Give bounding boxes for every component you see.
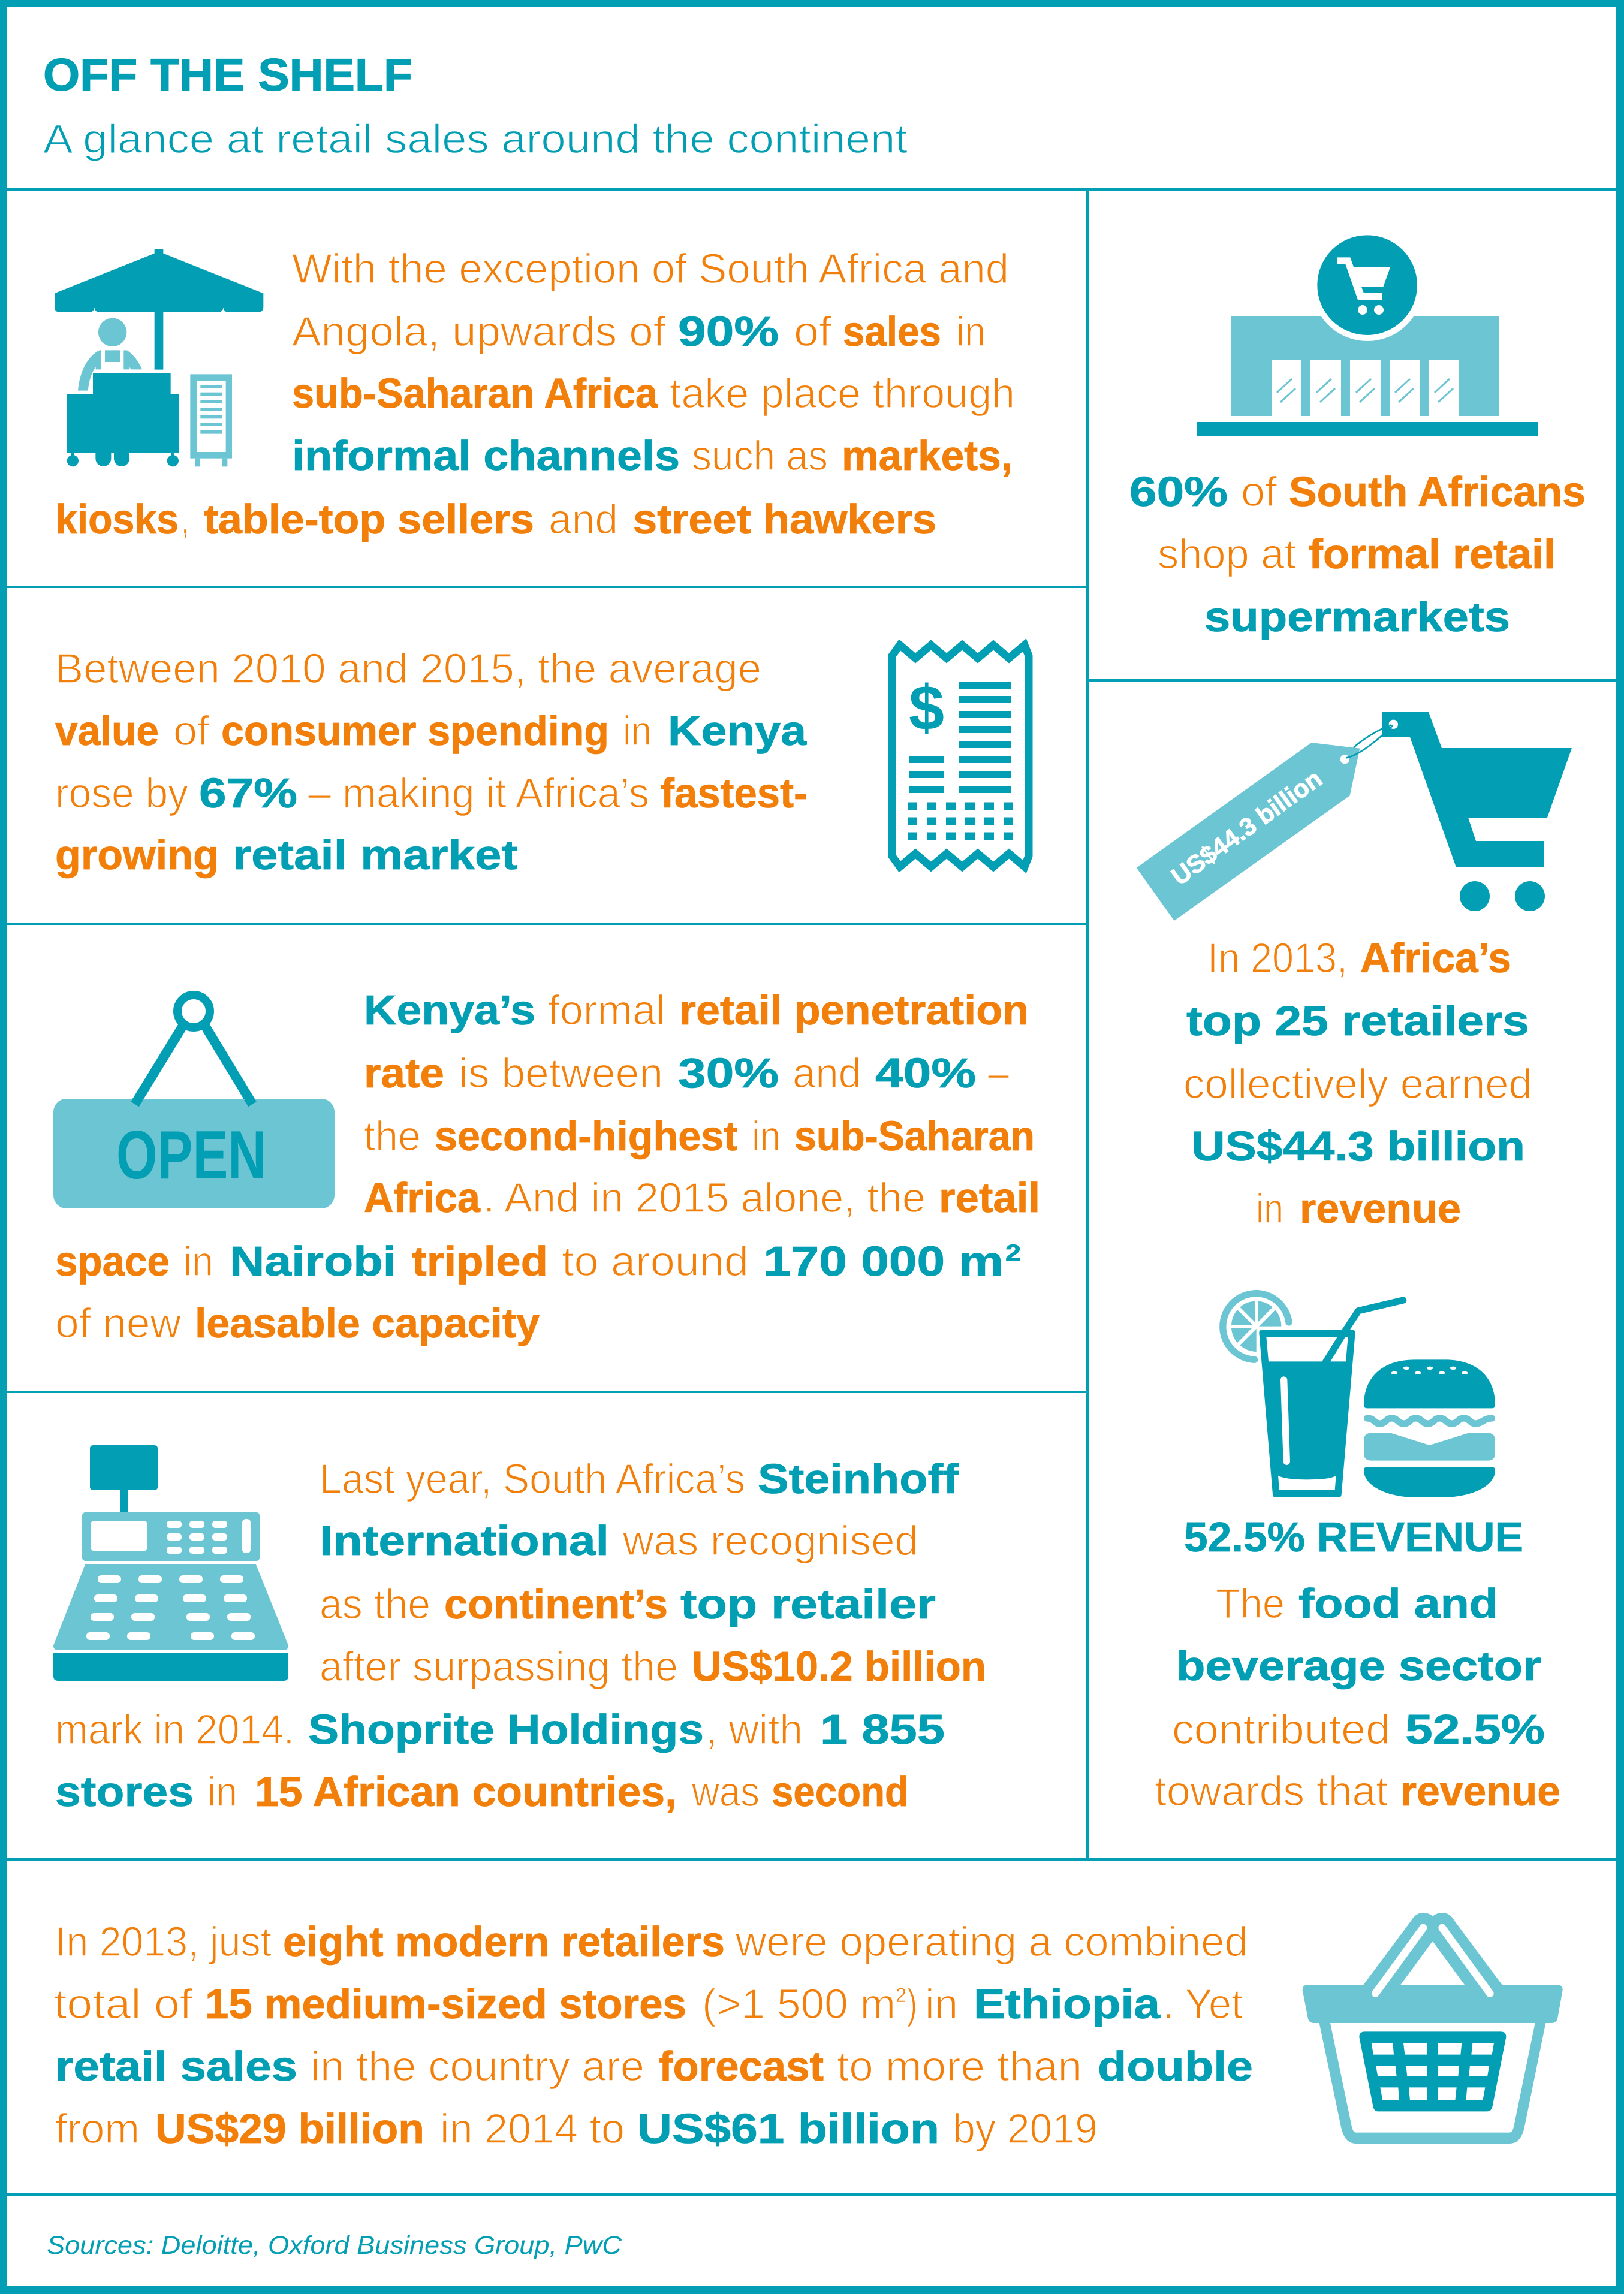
subtitle: A glance at retail sales around the continent [43, 116, 908, 162]
text: retail penetration: retail [939, 1174, 1040, 1221]
text: top retailers: 1 855 [820, 1706, 945, 1753]
text: retail penetration: 2 [1005, 1241, 1021, 1266]
text: retail penetration: in [183, 1238, 213, 1285]
text: retail penetration: 30% [678, 1050, 779, 1096]
text: consumer spending: value [55, 707, 159, 754]
text: top 25 retailers: Africa’s [1360, 935, 1511, 981]
text: retail penetration: second-highest [435, 1113, 737, 1159]
text: informal channels: kiosks [55, 496, 179, 542]
text: consumer spending: rose by [55, 770, 188, 816]
icon: street vendor stall [55, 249, 263, 466]
text: informal channels: Angola, upwards of [292, 308, 666, 355]
text: top retailers: 15 African countries, [255, 1768, 677, 1815]
icon: receipt [892, 645, 1029, 867]
text: supermarkets: shop at [1158, 530, 1296, 577]
text: informal channels: informal channels [292, 432, 680, 479]
text: top retailers: Last year, South Africa’s [320, 1455, 745, 1502]
text: top retailers: , with [706, 1706, 803, 1753]
icon: receipt: $ [909, 673, 944, 743]
text: Ethiopia retail sales: by 2019 [953, 2105, 1098, 2152]
text: informal channels: sub-Saharan Africa [292, 370, 658, 417]
text: informal channels: of [794, 308, 832, 355]
text: retail penetration: retail penetration [679, 987, 1029, 1033]
text: retail penetration: 40% [875, 1050, 976, 1096]
text: retail penetration: leasable capacity [195, 1300, 540, 1346]
text: informal channels: markets, [842, 432, 1013, 479]
text: retail penetration: in [752, 1113, 781, 1159]
panel: top 25 retailers and food revenue [1089, 682, 1616, 1858]
text: retail penetration: is between [459, 1050, 663, 1096]
text: supermarkets: 60% [1129, 468, 1228, 515]
icon: open sign: OPEN [116, 1117, 266, 1193]
text: informal channels: sales [843, 308, 941, 355]
title: OFF THE SHELF [43, 50, 412, 101]
icon: shopping cart with price tag [1137, 712, 1572, 921]
text: Ethiopia retail sales: total of [54, 1981, 193, 2027]
text: informal channels: table-top sellers [204, 496, 534, 542]
text: top retailers: Steinhoff [758, 1455, 959, 1502]
text: consumer spending: of [173, 707, 210, 754]
sources: Sources: Deloitte, Oxford Business Group, PwC [47, 2231, 622, 2260]
text: consumer spending: – making it Africa’s [308, 770, 649, 816]
text: retail penetration: tripled [412, 1238, 548, 1285]
text: top retailers: after surpassing the [320, 1643, 678, 1690]
text: food and beverage revenue: food and [1298, 1580, 1498, 1627]
text: retail penetration: the [364, 1113, 421, 1159]
text: Ethiopia retail sales: ) [907, 1981, 917, 2027]
text: informal channels: With the exception of South Africa and [292, 245, 1009, 292]
text: Ethiopia retail sales: US$29 billion [155, 2105, 424, 2152]
icon: open sign [53, 995, 335, 1208]
text: retail penetration: Africa [364, 1174, 481, 1221]
text: food and beverage revenue: 52.5% [1405, 1706, 1545, 1753]
text: retail penetration: formal [548, 987, 665, 1033]
text: top retailers [55, 1455, 986, 1815]
text: informal channels [55, 245, 1015, 542]
text: top retailers: in [207, 1768, 237, 1815]
text: Ethiopia retail sales: in [925, 1981, 958, 2027]
text: consumer spending [55, 645, 808, 878]
text: top 25 retailers: revenue [1300, 1185, 1461, 1232]
text: top 25 retailers: collectively earned [1183, 1060, 1532, 1107]
text: consumer spending: retail market [233, 831, 517, 878]
panel: Ethiopia retail sales [7, 1861, 1616, 2193]
text: Ethiopia retail sales: in 2014 to [440, 2105, 625, 2152]
text: consumer spending: 67% [199, 770, 297, 816]
text: top retailers: International [320, 1517, 609, 1564]
text: retail penetration [55, 987, 1040, 1346]
text: informal channels: take place through [670, 370, 1015, 417]
text: retail penetration: to around [562, 1238, 749, 1285]
icon: shopping basket [1303, 1913, 1563, 2144]
text: consumer spending: Between 2010 and 2015, the average [55, 645, 761, 692]
panel: consumer spending in Kenya [7, 588, 1086, 923]
text: Ethiopia retail sales: (>1 500 m [702, 1981, 896, 2027]
text: supermarkets: supermarkets [1204, 593, 1510, 640]
text: retail penetration: 170 000 m [763, 1238, 1004, 1285]
text: Ethiopia retail sales: 2 [896, 1984, 906, 2007]
text: consumer spending: in [623, 707, 652, 754]
text: food and beverage revenue: 52.5% REVENUE [1184, 1514, 1523, 1560]
icon: drink and burger [1223, 1294, 1495, 1497]
text: Ethiopia retail sales: double [1098, 2043, 1253, 2090]
text: retail penetration: space [55, 1238, 170, 1285]
text: top 25 retailers: In 2013, [1207, 935, 1348, 981]
text: top retailers: stores [55, 1768, 194, 1815]
text: Ethiopia retail sales: In 2013, just [55, 1918, 272, 1965]
text: consumer spending: growing [55, 831, 219, 878]
text: supermarkets: formal retail [1309, 530, 1556, 577]
text: top retailers: was recognised [622, 1517, 918, 1564]
text: informal channels: such as [692, 432, 828, 479]
text: top 25 retailers [1183, 935, 1532, 1232]
text: Ethiopia retail sales: US$61 billion [637, 2105, 939, 2152]
text: consumer spending: Kenya [668, 707, 807, 754]
text: food and beverage revenue: revenue [1400, 1768, 1560, 1814]
text: retail penetration: Kenya’s [364, 987, 535, 1033]
text: retail penetration: and [793, 1050, 861, 1096]
text: food and beverage revenue: contributed [1172, 1706, 1390, 1753]
text: supermarkets [1129, 468, 1586, 640]
text: informal channels: 90% [678, 308, 779, 355]
text: top retailers: top retailer [680, 1581, 936, 1627]
text: Ethiopia retail sales: in the country are [311, 2043, 644, 2090]
text: food and beverage revenue [1155, 1514, 1560, 1814]
text: top retailers: mark in 2014. [55, 1706, 294, 1753]
text: top 25 retailers: in [1256, 1185, 1283, 1232]
text: Ethiopia retail sales: retail sales [55, 2043, 297, 2090]
text: Ethiopia retail sales: to more than [837, 2043, 1082, 2090]
text: retail penetration: – [988, 1050, 1009, 1096]
text: top 25 retailers: US$44.3 billion [1191, 1123, 1525, 1169]
text: top retailers: continent’s [444, 1581, 668, 1627]
text: Ethiopia retail sales: were operating a combined [735, 1918, 1248, 1965]
text: informal channels: and [549, 496, 618, 542]
text: Ethiopia retail sales: from [55, 2105, 140, 2152]
text: food and beverage revenue: beverage sector [1176, 1642, 1541, 1689]
text: top retailers: Shoprite Holdings [308, 1706, 704, 1753]
icon: shopping cart with price tag: US$44.3 billion [1166, 764, 1327, 891]
text: Ethiopia retail sales: 15 medium-sized stores [205, 1981, 686, 2027]
text: Ethiopia retail sales: eight modern retailers [283, 1918, 725, 1965]
text: supermarkets: South Africans [1289, 468, 1586, 515]
text: food and beverage revenue: towards that [1155, 1768, 1388, 1814]
text: consumer spending: consumer spending [221, 707, 609, 754]
text: informal channels: street hawkers [633, 496, 936, 542]
text: supermarkets: of [1241, 468, 1277, 515]
panel: top retailers [7, 1393, 1086, 1858]
text: top retailers: second [772, 1768, 909, 1815]
panel: informal channels [7, 191, 1086, 586]
header [43, 50, 908, 162]
text: food and beverage revenue: The [1216, 1580, 1285, 1627]
text: consumer spending: fastest- [661, 770, 808, 816]
text: Ethiopia retail sales [54, 1918, 1253, 2152]
text: Ethiopia retail sales: forecast [659, 2043, 824, 2090]
text: Ethiopia retail sales: . Yet [1163, 1981, 1243, 2027]
panel: supermarkets [1089, 191, 1616, 679]
text: top 25 retailers: top 25 retailers [1186, 997, 1529, 1044]
text: retail penetration: of new [55, 1300, 181, 1346]
text: informal channels: in [956, 308, 986, 355]
text: top retailers: as the [320, 1581, 430, 1627]
text: top retailers: was [691, 1768, 760, 1815]
text: informal channels: , [181, 496, 189, 542]
text: retail penetration: Nairobi [230, 1238, 396, 1285]
icon: supermarket building [1197, 230, 1538, 436]
text: Ethiopia retail sales: Ethiopia [974, 1981, 1161, 2027]
text: retail penetration: . And in 2015 alone, the [483, 1174, 926, 1221]
text: retail penetration: sub-Saharan [794, 1113, 1035, 1159]
icon: cash register [53, 1445, 288, 1681]
text: top retailers: US$10.2 billion [692, 1643, 986, 1690]
panel: Kenya retail penetration [7, 925, 1086, 1391]
text: retail penetration: rate [364, 1050, 444, 1096]
